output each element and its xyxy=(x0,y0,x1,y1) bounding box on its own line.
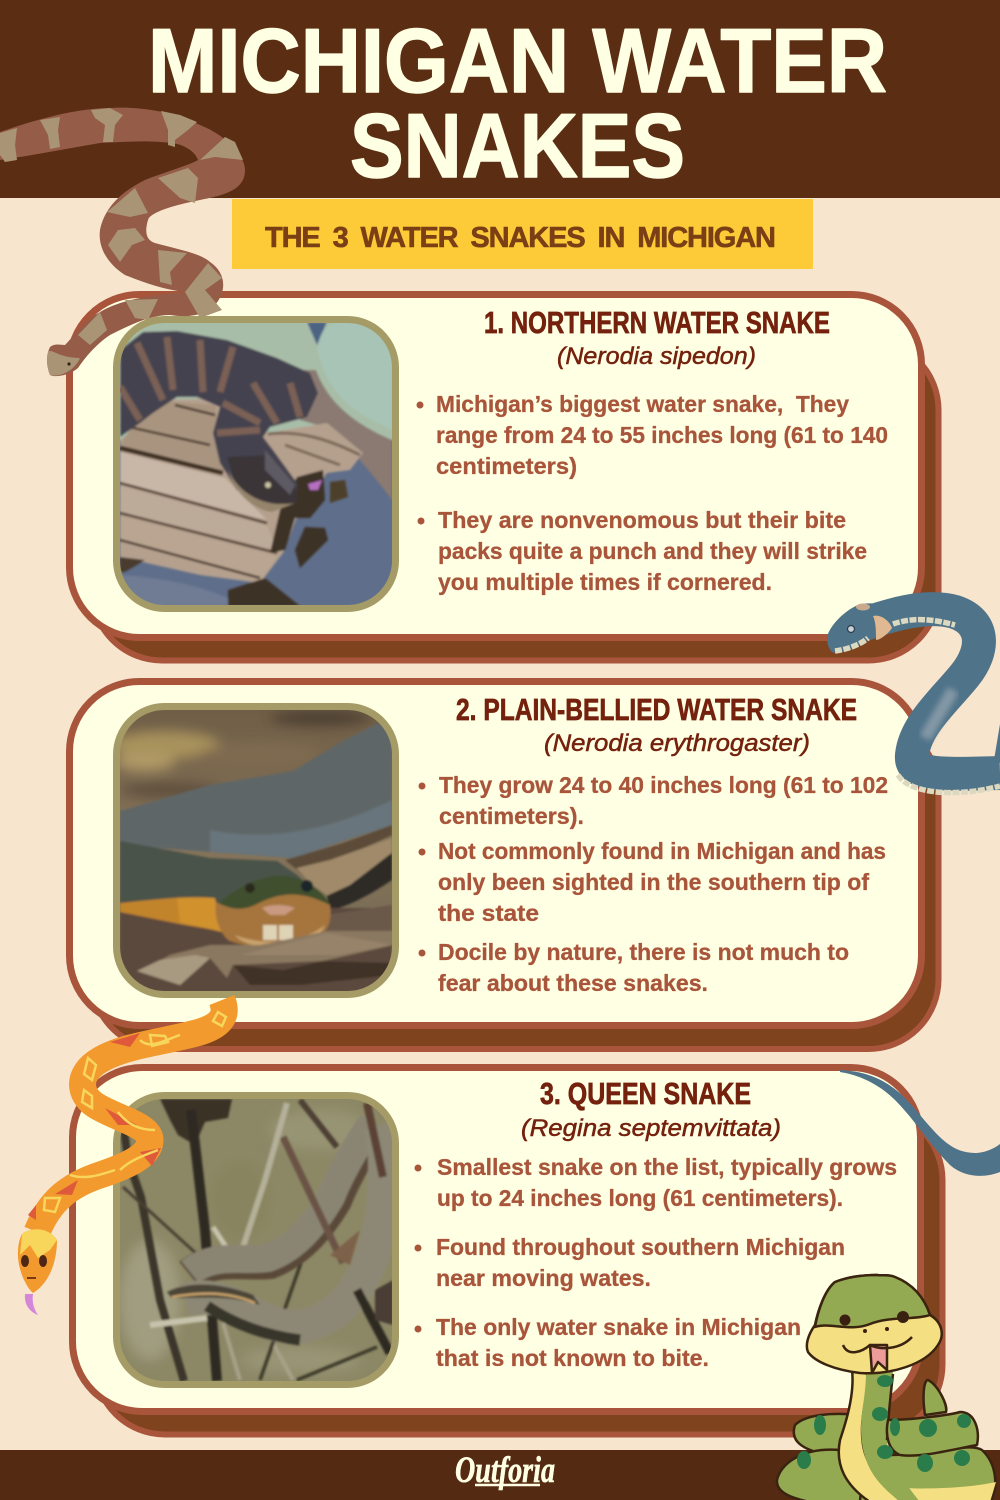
title: SNAKES xyxy=(350,96,685,197)
bullets: the state xyxy=(438,900,539,926)
title: MICHIGAN WATER xyxy=(148,11,887,112)
bullets: that is not known to bite. xyxy=(436,1345,709,1371)
footer band xyxy=(0,1450,1000,1500)
photo frame xyxy=(116,320,396,608)
heading: 2. PLAIN-BELLIED WATER SNAKE xyxy=(456,692,857,727)
bullets: fear about these snakes. xyxy=(438,970,708,996)
tail xyxy=(924,1380,946,1415)
card 1 front xyxy=(70,294,922,638)
photo frame xyxy=(116,706,396,994)
heading: 3. QUEEN SNAKE xyxy=(540,1076,751,1111)
bullets: They grow 24 to 40 inches long (61 to 102 xyxy=(439,772,888,798)
bullets xyxy=(414,1154,897,1371)
card 1 shadow xyxy=(92,340,938,660)
bullets: centimeters) xyxy=(436,453,577,479)
lower right coil xyxy=(860,1440,995,1500)
upper right coil xyxy=(887,1412,978,1456)
bullets xyxy=(418,772,888,996)
bullets: Found throughout southern Michigan xyxy=(436,1234,845,1260)
spots xyxy=(797,1375,971,1472)
card 2 shadow xyxy=(92,720,938,1049)
illustration: cartoon green snake xyxy=(777,1275,996,1500)
bullets: range from 24 to 55 inches long (61 to 140 xyxy=(436,422,888,448)
panel: plain-bellied water snake xyxy=(70,682,938,1049)
neck xyxy=(839,1370,905,1500)
subtitle banner: THE 3 WATER SNAKES IN MICHIGAN xyxy=(265,222,778,254)
illustration: copper-banded snake xyxy=(0,108,245,376)
bullets: you multiple times if cornered. xyxy=(438,569,772,595)
bullets: Smallest snake on the list, typically grows xyxy=(437,1154,897,1180)
upper left coil xyxy=(794,1414,860,1460)
bullets: only been sighted in the southern tip of xyxy=(438,869,869,895)
illustration: blue snake xyxy=(827,603,1000,793)
scientific name: (Regina septemvittata) xyxy=(521,1115,781,1142)
heading: 1. NORTHERN WATER SNAKE xyxy=(484,305,830,340)
bullets: near moving wates. xyxy=(436,1265,651,1291)
title xyxy=(148,11,887,197)
photo: northern water snake on a log xyxy=(120,323,392,605)
head xyxy=(807,1275,942,1373)
bullets: centimeters). xyxy=(439,803,584,829)
bullets: They are nonvenomous but their bite xyxy=(438,507,846,533)
header band xyxy=(0,0,1000,198)
card 2 front xyxy=(70,682,922,1026)
bullets: Not commonly found in Michigan and has xyxy=(438,838,886,864)
bullets: Docile by nature, there is not much to xyxy=(438,939,849,965)
panel: northern water snake xyxy=(70,294,938,660)
card 3 front xyxy=(72,1068,920,1412)
logo: Outforia: Outforia xyxy=(455,1450,555,1491)
photo: plain-bellied water snake xyxy=(120,710,392,991)
photo frame xyxy=(116,1096,396,1384)
bullets: The only water snake in Michigan xyxy=(436,1314,801,1340)
lower left coil xyxy=(777,1450,870,1500)
photo: queen snake on branches xyxy=(120,1099,392,1381)
illustration: blue snake tail xyxy=(840,1070,1000,1176)
subtitle banner xyxy=(232,199,813,269)
scientific name: (Nerodia sipedon) xyxy=(557,343,756,370)
scientific name: (Nerodia erythrogaster) xyxy=(544,730,810,757)
bullets xyxy=(416,391,888,595)
bullets: packs quite a punch and they will strike xyxy=(438,538,867,564)
bullets: up to 24 inches long (61 centimeters). xyxy=(437,1185,843,1211)
panel: queen snake xyxy=(72,1068,942,1434)
card 3 shadow xyxy=(95,1110,942,1434)
illustration: orange snake xyxy=(18,1000,226,1315)
bullets: Michigan’s biggest water snake, They xyxy=(436,391,849,417)
